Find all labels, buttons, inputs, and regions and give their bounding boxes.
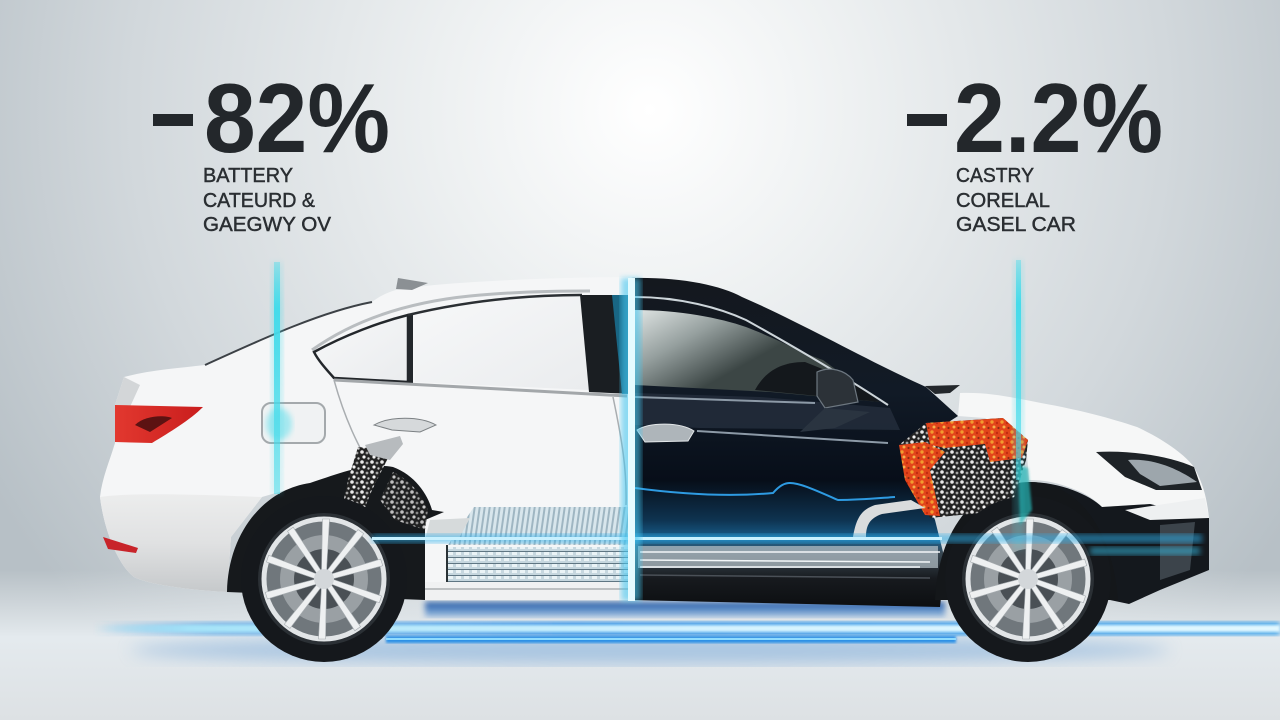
wing mirror <box>817 369 858 408</box>
front window seat <box>755 362 880 402</box>
body: white rear half <box>100 277 640 600</box>
gasoline label: CORELAL <box>956 190 1050 212</box>
headlight <box>1096 452 1202 490</box>
gasoline label <box>956 165 1076 236</box>
gasoline label: GASEL CAR <box>956 214 1076 236</box>
battery label: GAEGWY OV <box>203 214 332 236</box>
front arch <box>935 482 1118 600</box>
battery label: CATEURD & <box>203 190 316 212</box>
sill wiring <box>638 546 940 578</box>
waistline chrome <box>334 380 627 396</box>
rear door window <box>413 295 589 390</box>
tail light <box>115 405 203 443</box>
door shut lines <box>334 380 626 505</box>
rear reflector <box>103 537 138 553</box>
rear suspension <box>340 436 403 520</box>
electric pulse line <box>635 483 895 500</box>
rear door handle <box>374 418 436 432</box>
stat: battery car <box>153 63 390 236</box>
drive beam <box>372 534 1202 555</box>
gasoline figure: 2.2% <box>954 63 1163 173</box>
car <box>100 277 1209 662</box>
front lower fascia <box>1029 482 1209 604</box>
gasoline label: CASTRY <box>956 165 1034 187</box>
battery label <box>203 165 332 236</box>
battery label: BATTERY <box>203 165 293 187</box>
battery figure: 82% <box>204 63 390 173</box>
bumper grey intake <box>1160 522 1195 580</box>
engine <box>899 418 1028 518</box>
cowl <box>925 385 960 394</box>
window top edge <box>408 295 582 315</box>
boot shadow <box>115 377 140 420</box>
rear arch <box>227 466 444 600</box>
front window chrome <box>635 297 888 405</box>
door sheen band <box>635 393 900 430</box>
headlight lens <box>1128 460 1197 486</box>
door crease lines <box>635 397 888 443</box>
centre divider beam <box>621 278 641 601</box>
rear brake mesh <box>380 472 428 530</box>
right callout beam <box>1013 260 1032 550</box>
B pillar <box>580 295 632 394</box>
stat: gasoline car <box>907 63 1163 236</box>
left callout beam <box>266 262 292 494</box>
divider pillar <box>408 314 413 383</box>
white nose <box>958 393 1209 518</box>
fuel door <box>262 403 325 443</box>
rear quarter window <box>314 315 408 382</box>
rear wheel <box>241 496 407 662</box>
exhaust pipe <box>853 500 925 537</box>
front wheel <box>945 496 1111 662</box>
roof chrome line <box>312 291 590 350</box>
front window <box>635 310 880 402</box>
shark fin <box>396 278 428 290</box>
body: dark front half <box>631 278 958 607</box>
battery pack <box>425 507 632 600</box>
mirror shadow <box>800 408 870 432</box>
rear bumper <box>100 494 262 592</box>
pillar blue reflection <box>612 295 632 394</box>
bumper highlight <box>1125 498 1209 520</box>
ground light streak <box>95 602 1280 664</box>
rear glass edge <box>205 302 372 365</box>
front door handle <box>637 424 694 442</box>
